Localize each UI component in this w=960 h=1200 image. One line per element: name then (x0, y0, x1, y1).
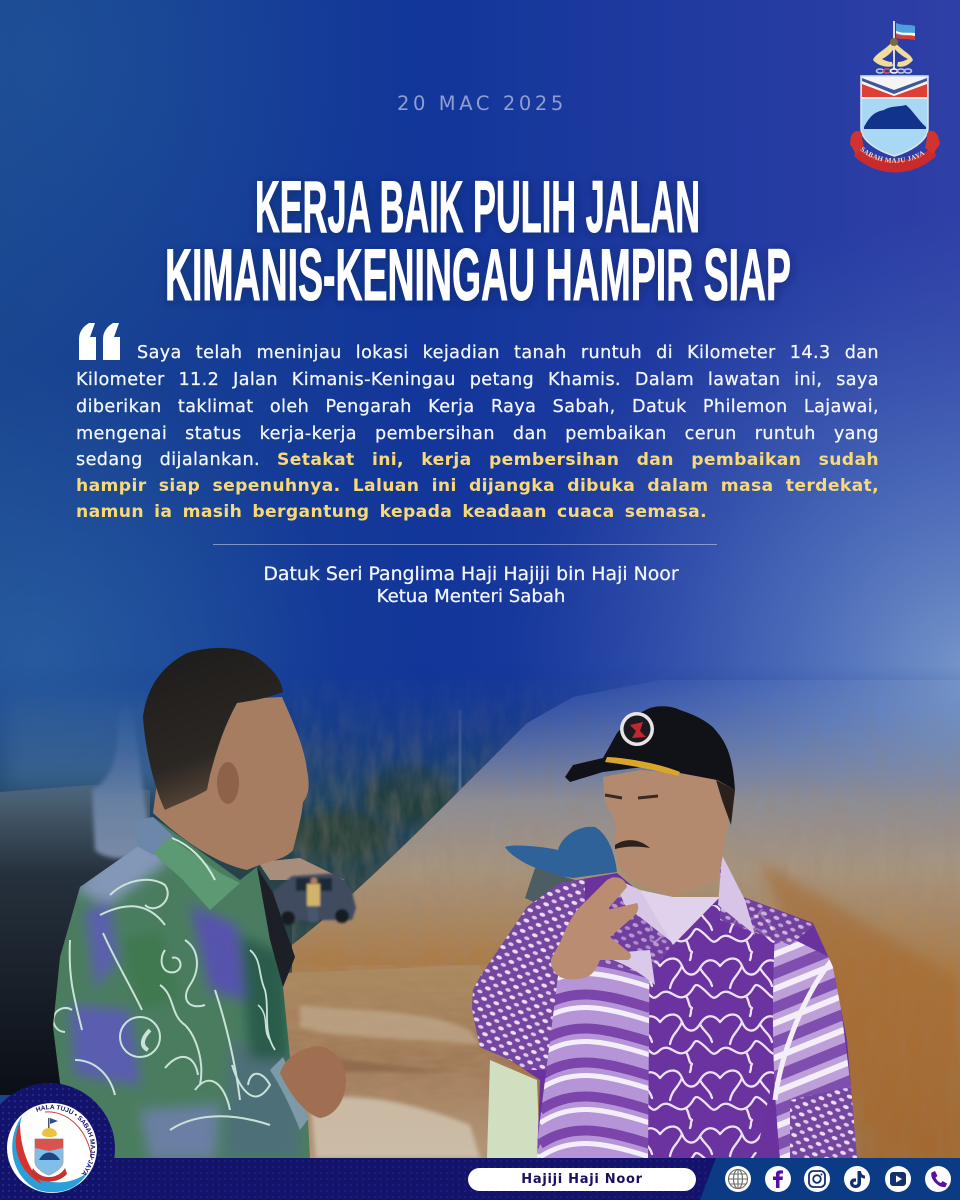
neck and face (603, 770, 733, 897)
black cap (565, 706, 735, 790)
purple shirt (465, 850, 865, 1160)
title (164, 167, 795, 316)
flag (893, 21, 915, 69)
road patch (258, 858, 345, 880)
moustache (615, 840, 650, 849)
mount Kinabalu (864, 105, 926, 129)
icon: video play (885, 1166, 911, 1192)
quote text (76, 343, 879, 522)
social icons (725, 1166, 951, 1192)
wreath (876, 69, 912, 73)
sleeve cuff (270, 1057, 309, 1130)
date: 20 MAC 2025 (397, 92, 567, 115)
cap badge (620, 712, 654, 746)
shield (861, 76, 928, 156)
shirt collar (137, 817, 240, 910)
neck and face (153, 697, 309, 870)
attribution (263, 563, 679, 607)
muddy ground (283, 965, 539, 1158)
quote text: Kilometer 11.2 Jalan Kimanis-Keningau petang Khamis. Dalam lawatan ini, saya (76, 370, 879, 390)
footer bar (0, 1158, 960, 1200)
quote text: mengenai status kerja-kerja pembersihan dan pembaikan cerun runtuh yang (76, 424, 879, 444)
motto text: SABAH MAJU JAYA (860, 147, 925, 163)
man in purple batik shirt with cap (465, 706, 865, 1160)
quote text: Saya telah meninjau lokasi kejadian tanah runtuh di Kilometer 14.3 dan (137, 343, 879, 363)
round badge (0, 1083, 115, 1198)
quote text: diberikan taklimat oleh Pengarah Kerja Raya Sabah, Datuk Philemon Lajawai, (76, 397, 879, 417)
hair (143, 648, 283, 810)
shirt collars (612, 855, 755, 945)
eyes (605, 795, 658, 798)
name pill: Hajiji Haji Noor (521, 1172, 643, 1187)
icon: instagram (804, 1166, 830, 1192)
quote text: sedang dijalankan. Setakat ini, kerja pembersihan dan pembaikan sudah (76, 450, 879, 470)
forest backdrop (0, 660, 960, 980)
quote text: hampir siap sepenuhnya. Laluan ini dijangka dibuka dalam masa terdekat, (76, 476, 879, 496)
ear (217, 762, 239, 804)
icon: tiktok (844, 1166, 870, 1192)
quote mark (79, 323, 120, 360)
icon: phone (925, 1166, 951, 1192)
clasped arms (873, 42, 913, 67)
man in green batik shirt (50, 648, 346, 1160)
badge ring text: HALA TUJU • SABAH MAJU JAYA (36, 1104, 96, 1175)
scene behind the two men (0, 660, 960, 1160)
green shirt (50, 810, 320, 1160)
landslide hillside (292, 680, 960, 1160)
attribution: Ketua Menteri Sabah (377, 586, 565, 607)
icon: globe (725, 1166, 751, 1192)
vehicle in background (273, 873, 356, 925)
man in blue cap behind (487, 827, 617, 1158)
attribution: Datuk Seri Panglima Haji Hajiji bin Haji Noor (263, 563, 679, 585)
badge crest (31, 1118, 67, 1182)
dark vest strip (257, 867, 295, 987)
background figure on the left (0, 707, 152, 1095)
motto ribbon (850, 130, 940, 172)
raised hand (551, 877, 638, 979)
clasped hand (280, 1046, 346, 1118)
icon: facebook (765, 1166, 791, 1192)
name pill (468, 1168, 696, 1191)
quote text: namun ia masih bergantung kepada keadaan cuaca semasa. (76, 502, 707, 522)
crest: Sabah coat of arms (850, 21, 940, 172)
